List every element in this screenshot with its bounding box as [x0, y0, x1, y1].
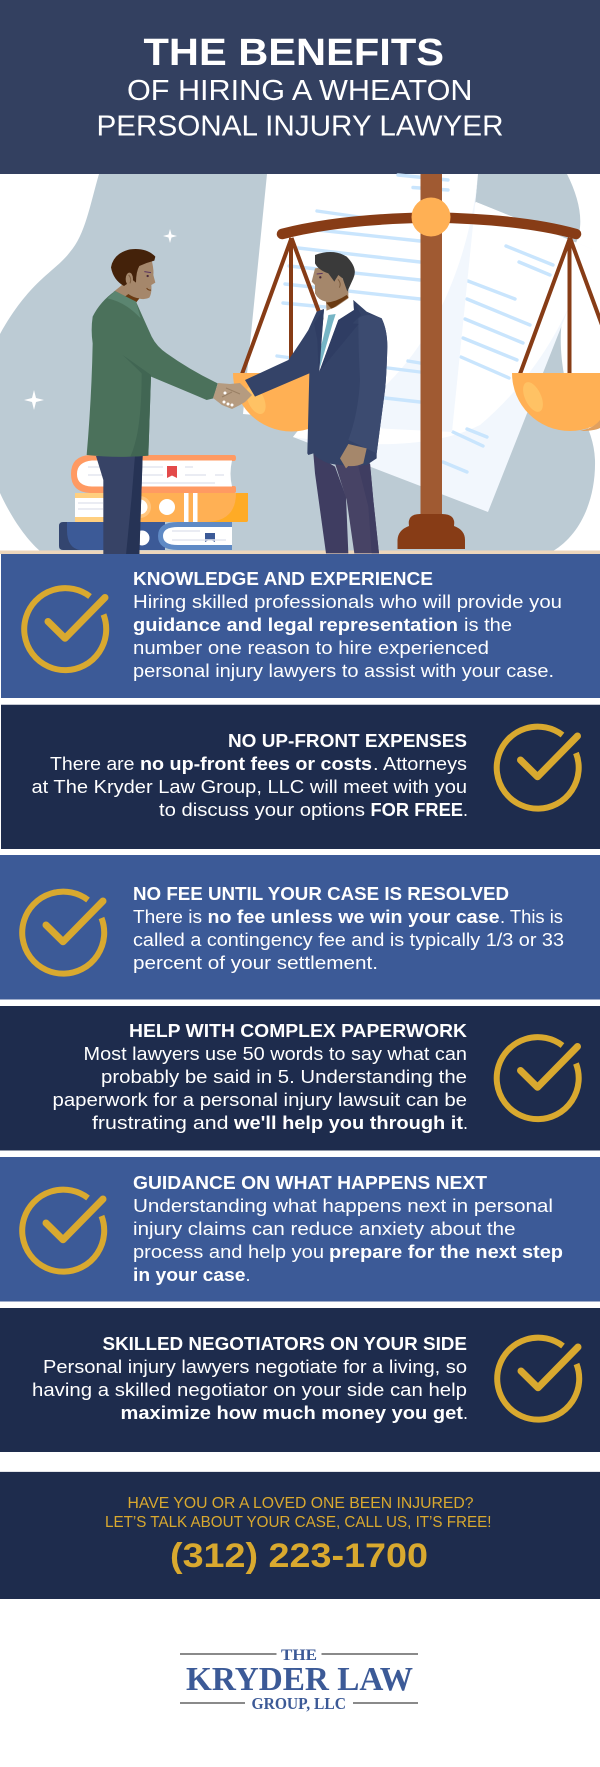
books: [59, 455, 248, 550]
logo: The Kryder Law Group, LLC: KRYDER LAW: [186, 1661, 413, 1698]
tie: [319, 314, 336, 367]
book: bottom blue: [59, 522, 232, 550]
text: help with complex paperwork: probably be said in 5. Understanding the: [101, 1067, 467, 1087]
illustration: handshake in front of scales of justice: [0, 174, 600, 555]
text: knowledge and experience: KNOWLEDGE AND EXPERIENCE: [133, 569, 433, 589]
text: no up-front expenses: [32, 731, 468, 820]
document: front sheet: [243, 174, 478, 432]
right man in navy suit: [245, 252, 387, 553]
text: skilled negotiators: having a skilled negotiator on your side can help: [32, 1380, 467, 1400]
text: no up-front expenses: FOR FREE: [370, 800, 463, 820]
jacket: [87, 291, 218, 457]
sparkles: [24, 229, 177, 410]
call to action text: LET’S TALK ABOUT YOUR CASE, CALL US, IT’S FREE!: [105, 1514, 492, 1531]
panel: header: [0, 0, 600, 174]
shirt: [319, 300, 354, 368]
text: help with complex paperwork: we'll help you through it: [233, 1113, 463, 1133]
logo: The Kryder Law Group, LLC: THE: [281, 1647, 317, 1664]
icon: check circle: [497, 1338, 579, 1420]
lapels: [314, 300, 361, 372]
trousers: [313, 453, 348, 553]
panel: no fee until resolved: [0, 855, 600, 1000]
text: help with complex paperwork: Most lawyers use 50 words to say what can: [84, 1044, 467, 1064]
text: guidance on what happens next: prepare for the next step: [329, 1242, 563, 1262]
text: guidance on what happens next: process and help you: [133, 1242, 324, 1262]
icon: check circle: [497, 727, 579, 809]
text: help with complex paperwork: [52, 1021, 468, 1133]
book: middle orange: [75, 493, 248, 522]
text: no fee until resolved: NO FEE UNTIL YOUR CASE IS RESOLVED: [133, 884, 509, 904]
icon: check circle: [22, 1190, 104, 1272]
text: help with complex paperwork: HELP WITH COMPLEX PAPERWORK: [129, 1021, 467, 1041]
title: [96, 32, 504, 142]
title: OF HIRING A WHEATON: [127, 75, 472, 107]
text: no fee until resolved: percent of your settlement.: [133, 953, 378, 973]
panel: no up-front expenses: [1, 704, 600, 849]
floor line: [0, 550, 600, 554]
background blob: [0, 174, 595, 551]
text: no fee until resolved: There is: [133, 907, 202, 927]
logo: The Kryder Law Group, LLC: GROUP, LLC: [252, 1694, 346, 1713]
panel: help with complex paperwork: [0, 1006, 600, 1150]
document: back sheet: [293, 202, 592, 512]
text: knowledge and experience: guidance and legal representation: [133, 615, 458, 635]
trousers: [96, 455, 143, 555]
suit jacket: [245, 300, 387, 466]
text: no up-front expenses: at The Kryder Law Group, LLC will meet with you: [32, 777, 467, 797]
text: guidance on what happens next: .: [246, 1265, 251, 1285]
text: skilled negotiators: [32, 1334, 468, 1423]
call to action text: HAVE YOU OR A LOVED ONE BEEN INJURED?: [128, 1495, 474, 1512]
title: PERSONAL INJURY LAWYER: [96, 110, 504, 142]
call to action text: [105, 1495, 492, 1531]
text: guidance on what happens next: Understanding what happens next in personal: [133, 1196, 553, 1216]
text: knowledge and experience: is the: [464, 615, 512, 635]
text: skilled negotiators: maximize how much money you get: [120, 1403, 463, 1423]
title: THE BENEFITS: [144, 32, 444, 74]
text: help with complex paperwork: .: [463, 1113, 468, 1133]
handshake hands: [213, 383, 252, 409]
head and neck: [312, 267, 348, 313]
book: top coral: [71, 455, 236, 493]
scale: left chains and pan: [233, 238, 350, 431]
text: no fee until resolved: no fee unless we win your case: [208, 907, 500, 927]
logo: The Kryder Law Group, LLC: [180, 1647, 418, 1713]
text: guidance on what happens next: injury claims can reduce anxiety about the: [133, 1219, 516, 1239]
jacket sleeve: [348, 315, 387, 453]
panel: guidance on what happens next: [0, 1157, 600, 1302]
text: no up-front expenses: NO UP-FRONT EXPENSES: [228, 731, 467, 751]
left man in green jacket: [87, 249, 218, 555]
text: no up-front expenses: to discuss your options: [159, 800, 365, 820]
text: no fee until resolved: . This is: [500, 907, 563, 927]
text: knowledge and experience: Hiring skilled professionals who will provide you: [133, 592, 562, 612]
icon: check circle: [497, 1037, 579, 1119]
hand at side: [340, 444, 367, 468]
icon: check circle: [22, 892, 104, 974]
icon: check circle: [24, 588, 106, 670]
text: help with complex paperwork: frustrating and: [92, 1113, 228, 1133]
text: guidance on what happens next: [133, 1173, 563, 1285]
text: help with complex paperwork: paperwork for a personal injury lawsuit can be: [52, 1090, 467, 1110]
text: knowledge and experience: number one reason to hire experienced: [133, 638, 489, 658]
panel: skilled negotiators: [0, 1308, 600, 1452]
text: guidance on what happens next: in your case: [133, 1265, 246, 1285]
panel: knowledge and experience: [1, 554, 600, 698]
scale: pole, beam, hub and base: [282, 174, 576, 549]
panel: call to action: [0, 1472, 600, 1599]
text: no up-front expenses: . Attorneys: [373, 754, 467, 774]
text: skilled negotiators: .: [463, 1403, 468, 1423]
scale: right chains and pan: [512, 238, 600, 431]
text: no up-front expenses: There are: [50, 754, 134, 774]
text: no fee until resolved: [133, 884, 564, 973]
text: no up-front expenses: .: [463, 800, 468, 820]
text: knowledge and experience: personal injury lawyers to assist with your case.: [133, 661, 554, 681]
text: no fee until resolved: called a contingency fee and is typically 1/3 or 33: [133, 930, 564, 950]
text: skilled negotiators: SKILLED NEGOTIATORS ON YOUR SIDE: [102, 1334, 467, 1354]
text: knowledge and experience: [133, 569, 562, 681]
head and neck: [113, 260, 155, 303]
text: no up-front expenses: no up-front fees or costs: [140, 754, 372, 774]
text: guidance on what happens next: GUIDANCE ON WHAT HAPPENS NEXT: [133, 1173, 487, 1193]
phone number: (312) 223-1700: [170, 1537, 428, 1575]
text: skilled negotiators: Personal injury lawyers negotiate for a living, so: [43, 1357, 467, 1377]
